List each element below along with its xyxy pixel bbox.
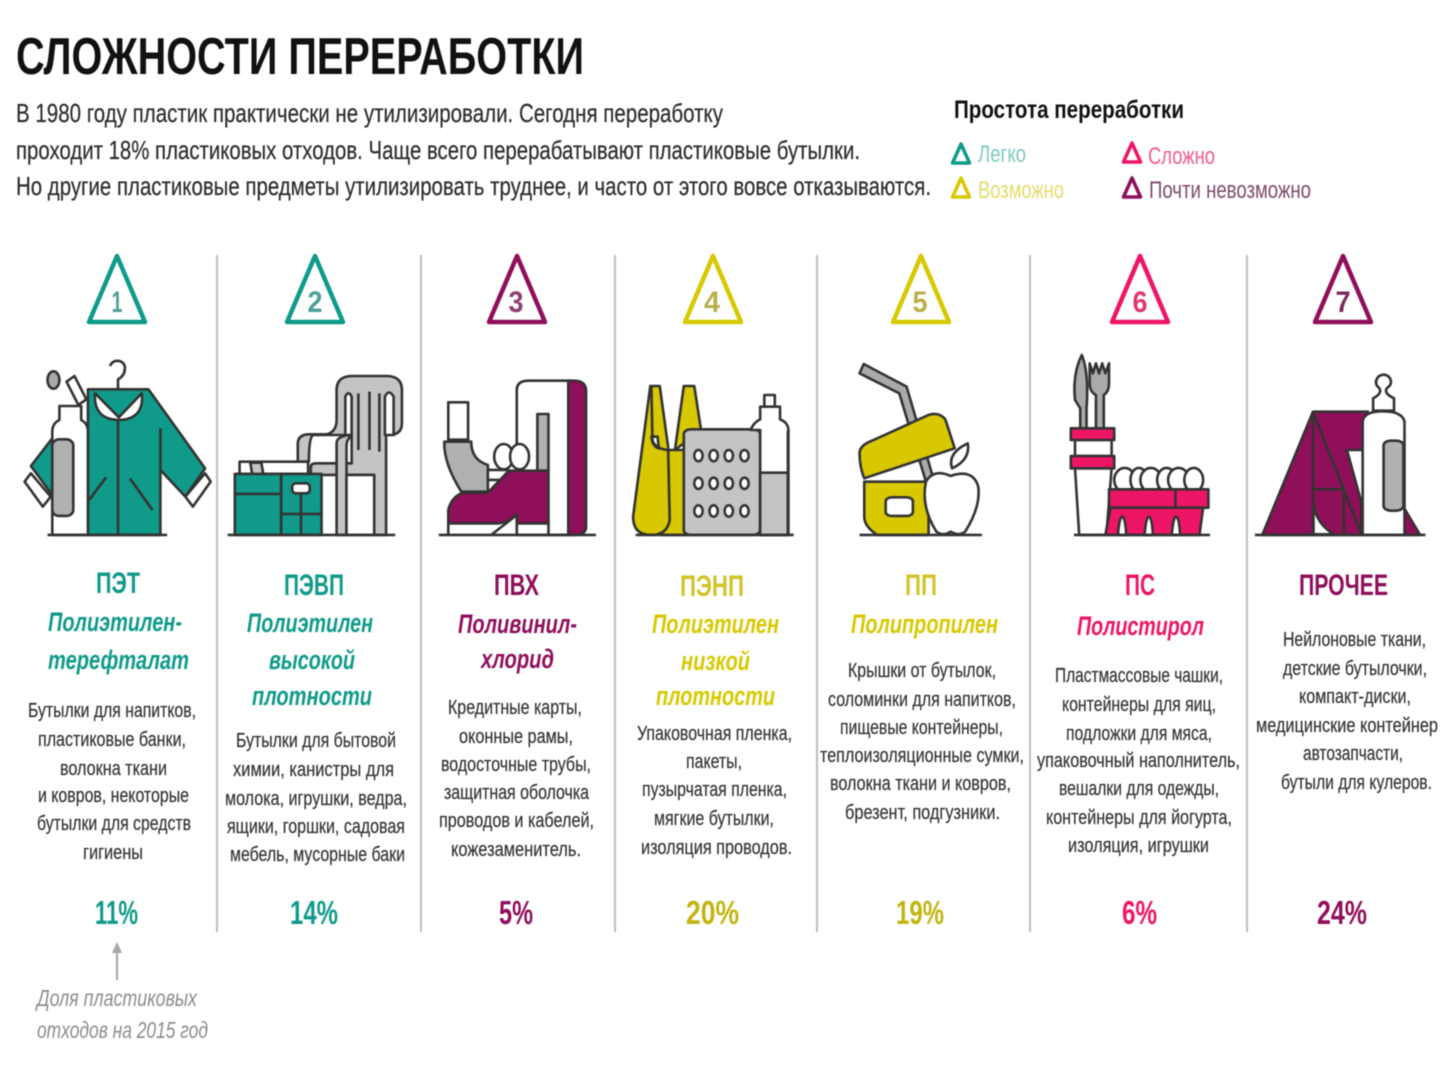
panel: PS [1037, 256, 1240, 931]
description: молока, игрушки, ведра, [225, 788, 407, 810]
panel: LDPE [633, 256, 794, 931]
panel: HDPE [225, 256, 407, 931]
triangle 1: 1 [112, 286, 122, 319]
icon: cutlery, cups, egg carton [1071, 355, 1210, 535]
description: Кредитные карты, [448, 697, 582, 719]
arrow [112, 942, 122, 980]
description: подложки для мяса, [1066, 723, 1212, 745]
name: Полипропилен [851, 609, 998, 639]
description [1037, 665, 1240, 857]
legend: Простота переработки [954, 96, 1184, 124]
code: ПС [1125, 569, 1155, 602]
name: Полиэтилен- [48, 607, 182, 637]
description: волокна ткани [60, 758, 167, 780]
panel: PP [820, 256, 1024, 931]
panel: other [1255, 256, 1438, 931]
description: пластиковые банки, [38, 729, 186, 751]
description: пищевые контейнеры, [840, 717, 1003, 739]
description: оконные рамы, [459, 726, 573, 748]
name: Поливинил- [458, 609, 577, 639]
triangle 6 [1112, 256, 1168, 322]
percent: 14% [290, 894, 338, 931]
description: Бутылки для напитков, [28, 700, 196, 722]
description: бутылки для средств [37, 813, 191, 835]
description: упаковочный наполнитель, [1037, 750, 1240, 772]
triangle 4: 4 [704, 286, 720, 319]
intro text: Но другие пластиковые предметы утилизировать труднее, и часто от этого вовсе отказываются. [16, 171, 931, 201]
icon: bag, pills, bottle [633, 386, 794, 535]
percent: 20% [686, 894, 739, 931]
percent: 19% [896, 894, 944, 931]
note: отходов на 2015 год [37, 1017, 208, 1043]
description: и ковров, некоторые [38, 785, 189, 807]
description: мягкие бутылки, [654, 808, 774, 830]
description [1256, 629, 1438, 794]
description [225, 730, 407, 866]
description: защитная оболочка [444, 782, 590, 804]
code: ПВХ [494, 569, 539, 602]
description [28, 700, 196, 864]
legend: Почти невозможно [1149, 177, 1311, 204]
description: Крышки от бутылок, [848, 660, 996, 682]
icon: chair and crate [228, 376, 402, 535]
percent: 11% [95, 894, 138, 931]
legend: Возможно [978, 177, 1064, 204]
triangle 6: 6 [1132, 286, 1148, 319]
name [458, 609, 577, 674]
code: ПЭНП [680, 570, 744, 603]
intro text: В 1980 году пластик практически не утилизировали. Сегодня переработку [16, 98, 723, 128]
description: пузырчатая пленка, [642, 779, 787, 801]
description [820, 660, 1024, 824]
triangle 7: 7 [1336, 286, 1350, 319]
description [439, 697, 594, 861]
code: ПЭВП [284, 569, 344, 602]
description: соломинки для напитков, [828, 689, 1016, 711]
triangle 3 [489, 256, 545, 322]
name: хлорид [480, 644, 554, 674]
triangle 4 [685, 256, 741, 322]
percent: 5% [499, 894, 533, 931]
description: химии, канистры для [233, 759, 394, 781]
name: плотности [656, 681, 775, 711]
intro text: проходит 18% пластиковых отходов. Чаще всего перерабатывают пластиковые бутылки. [16, 135, 860, 165]
description: пакеты, [686, 751, 742, 773]
description: Бутылки для бытовой [236, 730, 396, 752]
note: Доля пластиковых [35, 985, 198, 1011]
name: Полиэтилен [652, 609, 779, 639]
description: контейнеры для яиц, [1062, 694, 1216, 716]
triangle 7 [1315, 256, 1371, 322]
description: Пластмассовые чашки, [1055, 665, 1223, 687]
description: гигиены [83, 842, 143, 864]
name: низкой [681, 646, 750, 676]
triangle 5 [893, 256, 949, 322]
name: Полиэтилен [247, 608, 373, 638]
percent: 6% [1122, 894, 1157, 931]
description: изоляция проводов. [641, 837, 792, 859]
description: теплоизоляционные сумки, [820, 745, 1024, 767]
name: терефталат [48, 645, 189, 675]
description: мебель, мусорные баки [230, 844, 405, 866]
name: плотности [252, 681, 372, 711]
triangle 1 [89, 256, 145, 322]
code: ПРОЧЕЕ [1299, 569, 1388, 602]
title: СЛОЖНОСТИ ПЕРЕРАБОТКИ [16, 28, 584, 86]
note [35, 985, 208, 1043]
triangle 5: 5 [912, 286, 928, 319]
description: брезент, подгузники. [845, 802, 1000, 824]
intro text [16, 98, 931, 201]
description: Упаковочная пленка, [637, 723, 792, 745]
name: высокой [269, 645, 355, 675]
description: изоляция, игрушки [1068, 835, 1209, 857]
legend: Сложно [1148, 143, 1215, 170]
triangle 2: 2 [308, 286, 322, 319]
description: проводов и кабелей, [439, 810, 594, 832]
percent: 24% [1317, 894, 1367, 931]
legend: Легко [978, 141, 1026, 168]
triangle 2 [287, 256, 343, 322]
description: ящики, горшки, садовая [227, 816, 405, 838]
code: ПП [905, 569, 937, 602]
name [652, 609, 779, 711]
legend [952, 96, 1311, 204]
icon: shoe and card [439, 381, 596, 535]
panel: PET [25, 256, 211, 931]
icon: jacket and bottle [25, 361, 211, 535]
icon: straw, box, apple [860, 364, 982, 535]
code: ПЭТ [96, 567, 140, 600]
description: компакт-диски, [1299, 686, 1411, 708]
description: кожезаменитель. [451, 839, 581, 861]
name: Полистирол [1077, 611, 1204, 641]
description [637, 723, 792, 859]
description: контейнеры для йогурта, [1046, 807, 1232, 829]
description: автозапчасти, [1303, 743, 1403, 765]
name [247, 608, 373, 711]
description: волокна ткани и ковров, [830, 773, 1011, 795]
panel: PVC [439, 256, 596, 931]
name [48, 607, 189, 675]
description: вешалки для одежды, [1059, 778, 1219, 800]
icon: tent and baby bottle [1255, 375, 1425, 535]
description: водосточные трубы, [441, 754, 591, 776]
triangle 3: 3 [508, 286, 524, 319]
